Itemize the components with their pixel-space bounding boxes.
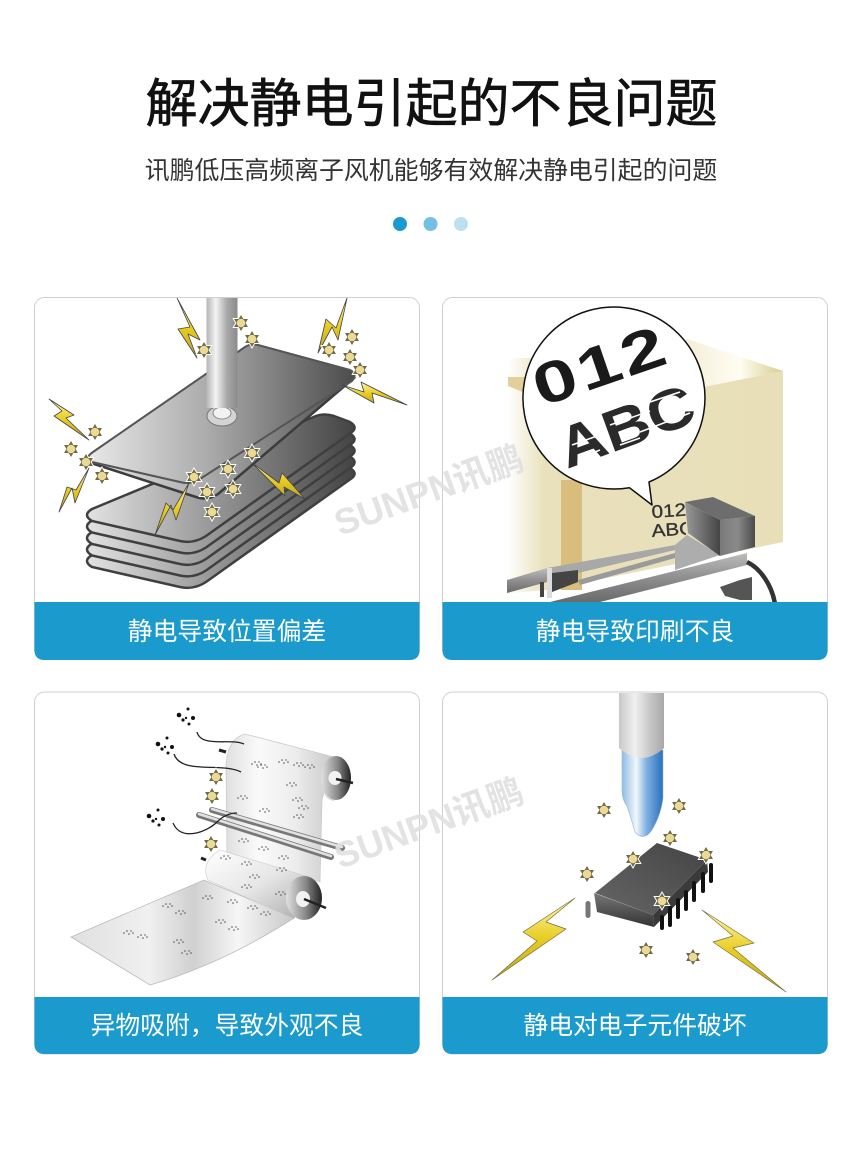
caption bar [442,602,828,660]
printed mark on carton: 012 [651,500,687,523]
subtitle: 讯鹏低压高频离子风机能够有效解决静电引起的问题 [145,157,717,185]
airborne particles [147,708,195,826]
caption bar [34,602,420,660]
caption bar: 静电对电子元件破坏 [523,1012,747,1040]
motion wires [173,732,244,834]
plate stack [87,414,355,588]
card frame [34,692,420,1054]
caption bar: 静电导致印刷不良 [536,618,734,646]
lifted plate underside [88,370,354,498]
illustration: film rollers [71,708,353,985]
pagination dots [393,217,468,231]
nozzle body [619,692,664,758]
card frame [34,298,420,660]
static sparks [63,314,368,521]
printer head block [685,497,755,556]
caption bar [34,997,420,1054]
static sparks [579,797,714,966]
caption bar: 异物吸附，导致外观不良 [91,1012,363,1040]
lightning bolts [49,298,407,535]
caption bar [442,997,828,1054]
cable [747,562,775,604]
bottom roller [201,850,326,920]
illustration: plates and suction pipe [49,296,407,588]
panel: electronic component damage [442,692,828,1054]
IC chip [586,843,711,928]
adhered particles [123,759,315,955]
static sparks [203,768,224,853]
title: 解决静电引起的不良问题 [145,76,718,134]
lightning bolts [492,898,786,992]
printed mark on carton: ABC [651,518,695,542]
panel: printing defect [442,298,828,660]
rails [507,535,752,602]
watermark upper: SUNPN讯鹏 [329,437,529,544]
speech bubble magnifier: 012 [524,312,676,419]
top roller end [219,750,353,801]
speech bubble magnifier [523,307,705,505]
illustration: nozzle and chip [492,692,786,992]
vertical film [226,734,334,882]
illustration: carton and printer [507,307,783,604]
printed mark on carton [652,503,686,538]
speech bubble magnifier: ABC [549,372,704,481]
lifted plate [88,344,355,483]
caption bar: 静电导致位置偏差 [128,618,326,646]
flat film [71,880,294,985]
card frame [442,692,828,1054]
card frame [442,298,828,660]
carton [508,339,783,593]
blue nozzle tip [622,750,663,837]
suction pipe [206,296,238,426]
panel: foreign matter adhesion [34,692,420,1054]
watermark lower: SUNPN讯鹏 [329,770,529,877]
guide rods [199,809,342,857]
panel: position deviation [34,296,420,660]
